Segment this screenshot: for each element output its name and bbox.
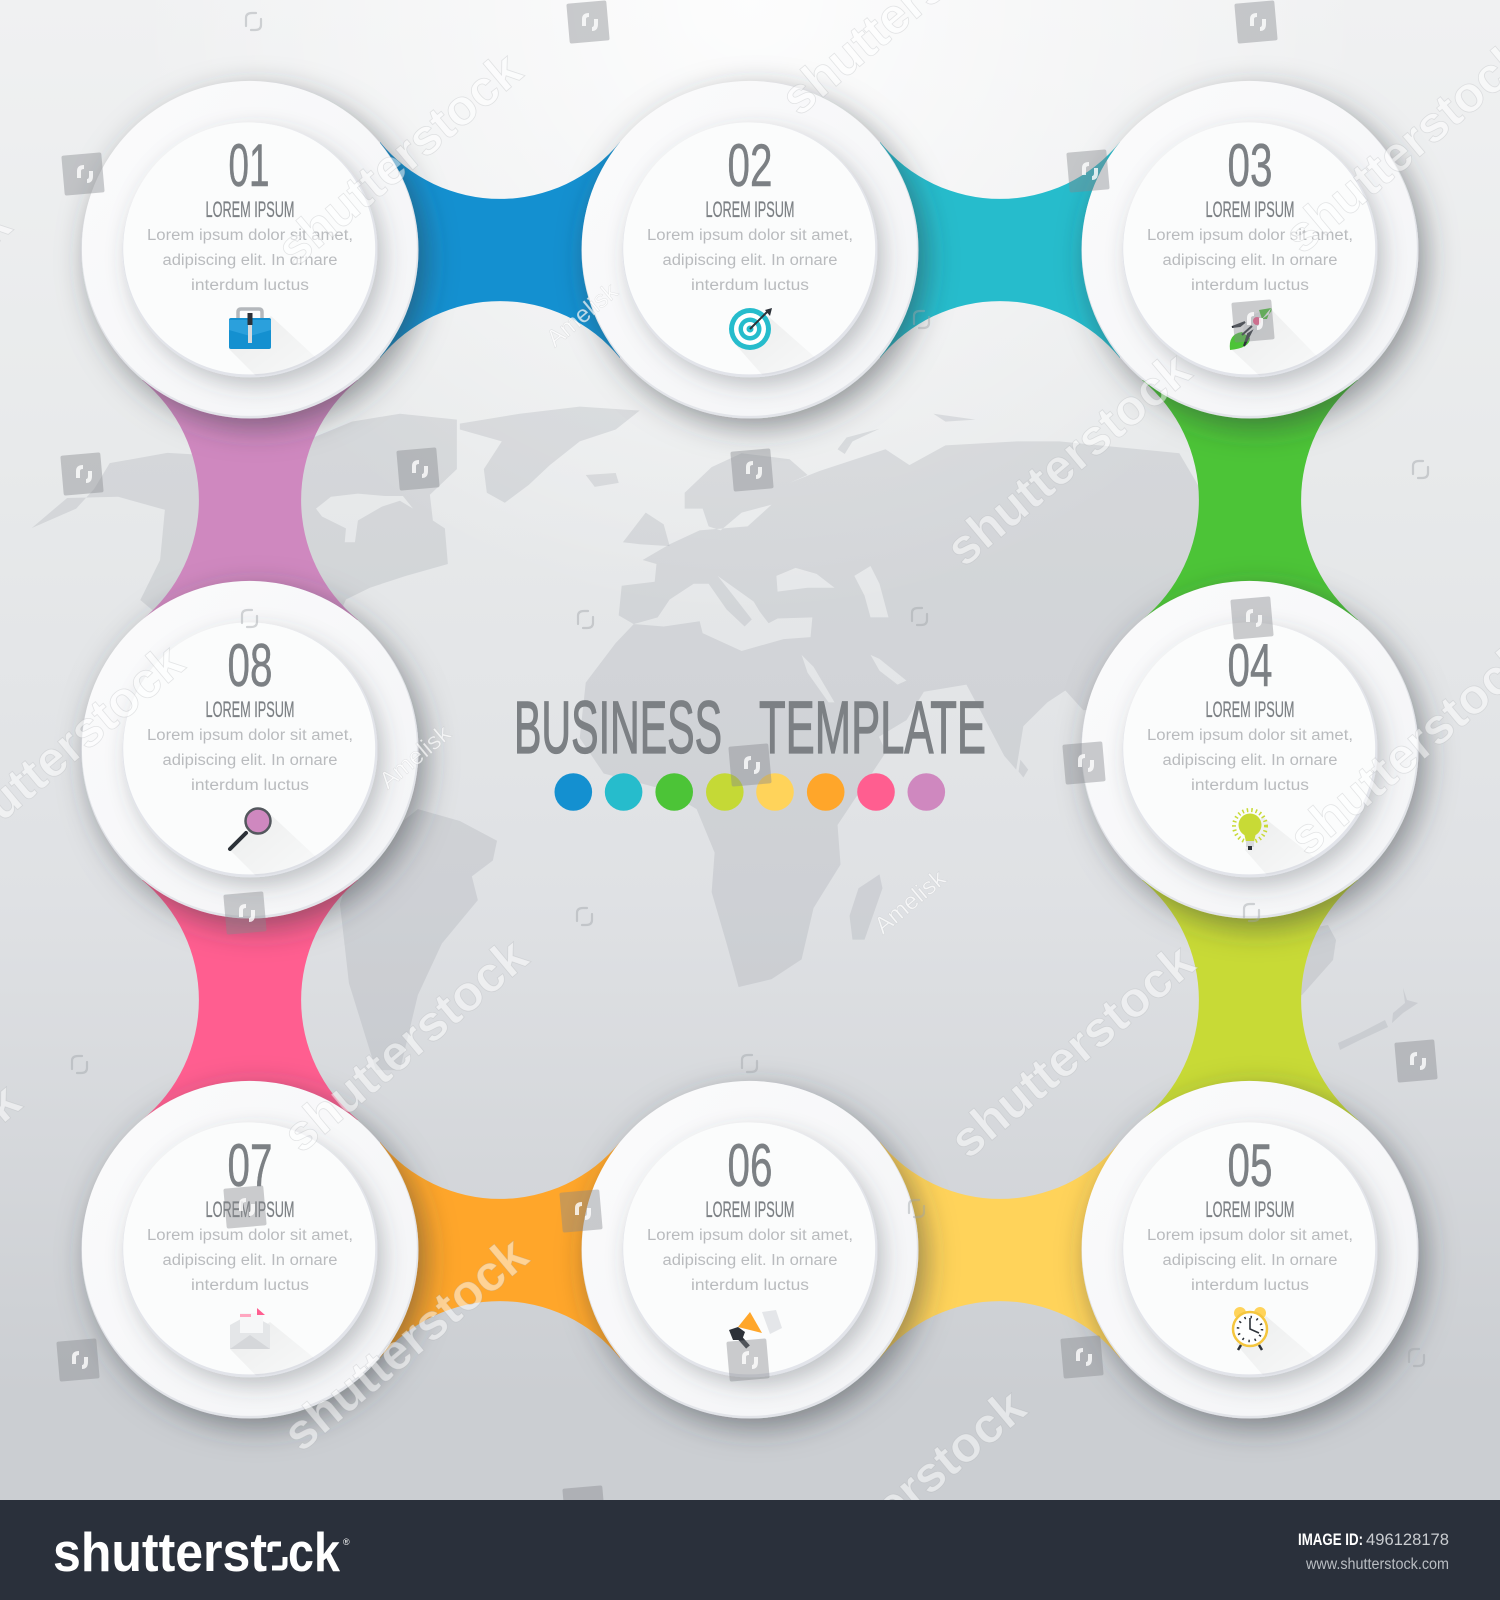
- body text: [147, 227, 353, 294]
- body text: interdum luctus: [1191, 1277, 1309, 1294]
- heading: LOREM IPSUM: [206, 697, 294, 722]
- heading: LOREM IPSUM: [1206, 1197, 1294, 1222]
- connector: 03 to 04 green: [1142, 380, 1358, 620]
- body text: Lorem ipsum dolor sit amet,: [647, 227, 853, 244]
- title: TEMPLATE: [759, 686, 986, 769]
- heading: LOREM IPSUM: [1206, 197, 1294, 222]
- icon: envelope: [230, 1308, 293, 1370]
- icon: magnifier: [228, 807, 290, 868]
- body text: [147, 727, 353, 794]
- image id: 496128178: [1366, 1531, 1449, 1549]
- connector: 05 to 06 yellow: [880, 1142, 1120, 1358]
- heading: LOREM IPSUM: [706, 1197, 794, 1222]
- number 07: 07: [228, 1132, 272, 1199]
- body text: adipiscing elit. In ornare: [162, 1252, 338, 1269]
- number 06: 06: [728, 1132, 772, 1199]
- icon: target: [729, 308, 793, 368]
- icon: light bulb: [1232, 808, 1292, 867]
- footer bar: [0, 1500, 1500, 1600]
- number 03: 03: [1228, 132, 1272, 199]
- connector: 08 to 01 purple: [142, 380, 358, 620]
- heading: LOREM IPSUM: [206, 1197, 294, 1222]
- watermark overlay: shutterstock: [935, 341, 1201, 577]
- number 01: 01: [228, 132, 270, 199]
- body text: interdum luctus: [1191, 777, 1309, 794]
- body text: Lorem ipsum dolor sit amet,: [147, 1227, 353, 1244]
- body text: Lorem ipsum dolor sit amet,: [647, 1227, 853, 1244]
- connector: 02 to 03 teal: [880, 142, 1120, 358]
- body text: interdum luctus: [191, 1277, 309, 1294]
- body text: adipiscing elit. In ornare: [1162, 752, 1338, 769]
- step 07: [82, 1081, 418, 1418]
- body text: adipiscing elit. In ornare: [162, 252, 338, 269]
- watermark overlay: Amelisk: [541, 277, 624, 353]
- body text: Lorem ipsum dolor sit amet,: [1147, 1227, 1353, 1244]
- image id: [1298, 1531, 1449, 1573]
- step 06: [582, 1081, 918, 1418]
- footer logo: ck: [288, 1521, 340, 1583]
- body text: Lorem ipsum dolor sit amet,: [1147, 727, 1353, 744]
- step 04: [1082, 581, 1418, 918]
- number 05: 05: [1228, 1132, 1272, 1199]
- body text: interdum luctus: [191, 777, 309, 794]
- connector: 07 to 08 pink: [142, 880, 358, 1120]
- watermark overlay: shutterstock: [939, 933, 1205, 1169]
- step 08: [82, 581, 418, 918]
- colour dots legend: [554, 773, 945, 811]
- step 01: [82, 81, 418, 418]
- body text: [1147, 1227, 1353, 1294]
- body text: [147, 1227, 353, 1294]
- image id: IMAGE ID:: [1298, 1531, 1363, 1549]
- body text: adipiscing elit. In ornare: [162, 752, 338, 769]
- body text: interdum luctus: [191, 277, 309, 294]
- image id: www.shutterstock.com: [1305, 1556, 1449, 1573]
- body text: Lorem ipsum dolor sit amet,: [147, 727, 353, 744]
- step 02: [582, 81, 918, 418]
- footer logo: shutterst: [53, 1521, 267, 1583]
- body text: interdum luctus: [691, 277, 809, 294]
- icon: megaphone: [729, 1310, 782, 1347]
- body text: adipiscing elit. In ornare: [1162, 1252, 1338, 1269]
- title: BUSINESS: [514, 686, 722, 769]
- body text: adipiscing elit. In ornare: [662, 1252, 838, 1269]
- watermark overlay: shutterstock: [266, 41, 532, 277]
- icon: rocket: [1230, 308, 1294, 368]
- heading: LOREM IPSUM: [706, 197, 794, 222]
- step 05: [1082, 1081, 1418, 1418]
- watermark overlay: Amelisk: [374, 719, 457, 795]
- step 03: [1082, 81, 1418, 418]
- icon: briefcase: [229, 307, 296, 372]
- number 04: 04: [1228, 632, 1272, 699]
- icon: alarm clock: [1232, 1307, 1293, 1368]
- body text: [647, 227, 853, 294]
- number 02: 02: [728, 132, 772, 199]
- body text: [647, 1227, 853, 1294]
- body text: interdum luctus: [691, 1277, 809, 1294]
- body text: adipiscing elit. In ornare: [662, 252, 838, 269]
- heading: LOREM IPSUM: [206, 197, 294, 222]
- watermark overlay: shutterstock: [272, 1226, 538, 1462]
- connector: 06 to 07 orange: [380, 1142, 620, 1358]
- body text: [1147, 727, 1353, 794]
- body text: adipiscing elit. In ornare: [1162, 252, 1338, 269]
- heading: LOREM IPSUM: [1206, 697, 1294, 722]
- connector: 01 to 02 blue: [380, 142, 620, 358]
- body text: Lorem ipsum dolor sit amet,: [147, 227, 353, 244]
- watermark overlay: Amelisk: [869, 864, 952, 940]
- world map: [32, 407, 1418, 1070]
- number 08: 08: [228, 632, 272, 699]
- body text: [1147, 227, 1353, 294]
- body text: Lorem ipsum dolor sit amet,: [1147, 227, 1353, 244]
- body text: interdum luctus: [1191, 277, 1309, 294]
- footer logo: ®: [343, 1537, 350, 1547]
- watermark overlay: shutterstock: [272, 927, 538, 1163]
- connector: 04 to 05 lime: [1142, 880, 1358, 1120]
